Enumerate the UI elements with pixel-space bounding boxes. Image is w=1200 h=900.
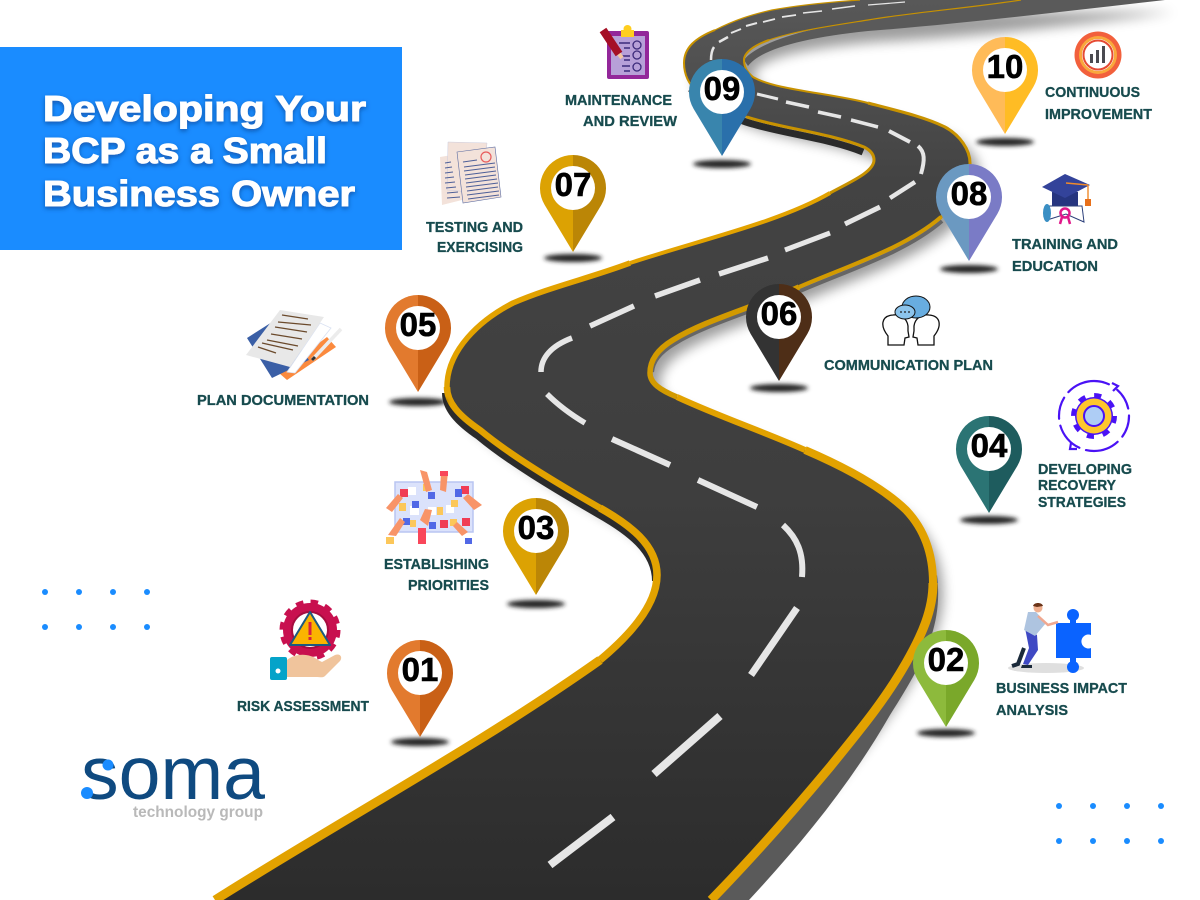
pin 05 bbox=[385, 295, 451, 406]
pin 02 bbox=[913, 630, 979, 737]
icon: person pushing puzzle piece bbox=[1008, 603, 1091, 673]
label: developing recovery strategies bbox=[1038, 461, 1132, 511]
road bbox=[215, 0, 1175, 900]
label: business impact analysis: BUSINESS IMPACT bbox=[996, 680, 1127, 697]
label: business impact analysis bbox=[996, 680, 1127, 719]
label: establishing priorities: PRIORITIES bbox=[408, 577, 489, 594]
label: developing recovery strategies: STRATEGIES bbox=[1038, 494, 1126, 511]
decorative dots right bbox=[1056, 803, 1164, 844]
icon: maintenance clipboard bbox=[603, 25, 649, 79]
heading: Business Owner bbox=[43, 173, 355, 214]
label: establishing priorities bbox=[384, 556, 489, 594]
pin 01 bbox=[387, 640, 453, 746]
label: communication plan: COMMUNICATION PLAN bbox=[824, 357, 993, 374]
decorative dots left bbox=[42, 589, 150, 630]
pin 04 bbox=[956, 416, 1022, 524]
label: continuous improvement bbox=[1045, 84, 1152, 123]
icon: recovery gear bbox=[1059, 381, 1129, 451]
pin 04: 04 bbox=[971, 427, 1008, 464]
icon: communication heads bbox=[883, 296, 939, 345]
label: developing recovery strategies: DEVELOPING bbox=[1038, 461, 1132, 478]
pin 07 bbox=[540, 155, 606, 262]
label: training and education: TRAINING AND bbox=[1012, 236, 1118, 253]
soma logo: soma bbox=[81, 731, 265, 815]
heading: Developing Your bbox=[43, 88, 366, 129]
pin 01: 01 bbox=[402, 651, 438, 688]
label: developing recovery strategies: RECOVERY bbox=[1038, 477, 1116, 494]
icon: continuous improvement bbox=[1074, 32, 1122, 78]
label: risk assessment: RISK ASSESSMENT bbox=[237, 698, 369, 715]
pin 06 bbox=[746, 284, 812, 392]
pin 09: 09 bbox=[704, 70, 740, 107]
icon: risk gear and hand bbox=[270, 602, 341, 680]
soma logo: technology group bbox=[133, 804, 263, 821]
pin 09 bbox=[689, 59, 755, 168]
pin 06: 06 bbox=[761, 295, 797, 332]
heading: BCP as a Small bbox=[43, 130, 327, 171]
label: business impact analysis: ANALYSIS bbox=[996, 702, 1068, 719]
pin 10 bbox=[972, 37, 1038, 146]
label: establishing priorities: ESTABLISHING bbox=[384, 556, 489, 573]
pin 10: 10 bbox=[987, 48, 1023, 85]
heading bbox=[43, 88, 366, 214]
title panel bbox=[0, 47, 402, 250]
pin 08 bbox=[936, 164, 1002, 273]
label: training and education: EDUCATION bbox=[1012, 258, 1098, 275]
icon: priorities board bbox=[386, 470, 482, 544]
label: maintenance and review: AND REVIEW bbox=[583, 113, 678, 130]
label: continuous improvement: IMPROVEMENT bbox=[1045, 106, 1152, 123]
pin 02: 02 bbox=[928, 641, 964, 678]
pin 08: 08 bbox=[951, 175, 987, 212]
label: continuous improvement: CONTINUOUS bbox=[1045, 84, 1140, 101]
icon: testing papers bbox=[440, 142, 501, 205]
label: testing and exercising: EXERCISING bbox=[437, 239, 523, 256]
pin 07: 07 bbox=[555, 166, 591, 203]
label: training and education bbox=[1012, 236, 1118, 275]
pin 03: 03 bbox=[518, 509, 554, 546]
label: plan documentation: PLAN DOCUMENTATION bbox=[197, 392, 369, 409]
label: testing and exercising: TESTING AND bbox=[426, 219, 523, 236]
icon: documents and pencil bbox=[246, 310, 341, 380]
pin 03 bbox=[503, 498, 569, 608]
label: maintenance and review: MAINTENANCE bbox=[565, 92, 672, 109]
pin 05: 05 bbox=[400, 306, 436, 343]
label: testing and exercising bbox=[426, 219, 523, 256]
icon: graduation cap bbox=[1042, 174, 1091, 224]
label: maintenance and review bbox=[565, 92, 678, 130]
